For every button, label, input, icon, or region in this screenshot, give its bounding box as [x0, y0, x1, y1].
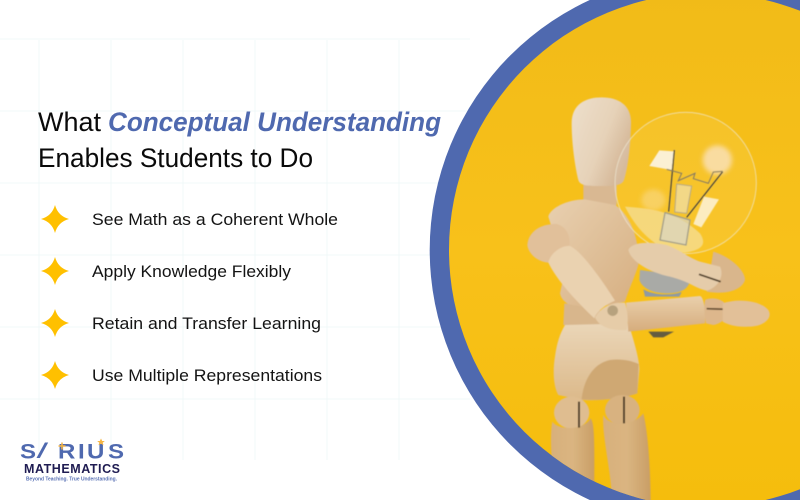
- glass mount: [660, 213, 690, 245]
- far arm behind bulb: [707, 252, 745, 293]
- mannequin hips: [554, 323, 639, 400]
- hip shadow patch: [582, 360, 639, 400]
- logo: Sirius Mathematics: R: [58, 439, 75, 463]
- item: apply knowledge flexibly: Apply Knowledge Flexibly: [92, 263, 292, 281]
- icon: logo star: [97, 438, 105, 445]
- title: [38, 107, 441, 173]
- title: Enables Students to Do: [38, 143, 313, 173]
- filament wires: [669, 150, 723, 217]
- shoulder joint: [527, 224, 570, 263]
- blue ring: [430, 0, 800, 500]
- mannequin abdomen: [563, 303, 600, 328]
- right knee joint: [605, 395, 640, 425]
- wooden mannequin holding a light bulb: [527, 97, 770, 500]
- right lower leg: [603, 413, 651, 500]
- glass bulb: [615, 112, 756, 254]
- logo: Sirius Mathematics: I: [78, 439, 85, 463]
- window highlight left: [649, 150, 674, 170]
- item: use multiple representations: Use Multiple Representations: [92, 367, 322, 385]
- logo slash: /: [36, 440, 49, 463]
- upper arm: [548, 246, 615, 318]
- item: retain and transfer learning: [41, 309, 321, 337]
- title: What: [38, 107, 102, 137]
- left knee joint: [554, 397, 589, 429]
- yellow photo background: [449, 0, 800, 500]
- bulb screw tip: [648, 332, 674, 337]
- logo: Sirius Mathematics: U: [87, 439, 104, 463]
- reflection lower left: [641, 189, 665, 211]
- logo: Sirius Mathematics: S: [108, 439, 124, 463]
- elbow screw: [607, 305, 618, 316]
- title: Conceptual Understanding: [108, 107, 441, 137]
- logo: Sirius Mathematics: [20, 438, 124, 482]
- item: apply knowledge flexibly: [41, 257, 292, 285]
- item: see math as a coherent whole: See Math as a Coherent Whole: [92, 211, 338, 229]
- item: use multiple representations: [41, 361, 322, 389]
- wrist slit: [699, 274, 721, 282]
- logo: Sirius Mathematics: S: [20, 439, 36, 463]
- elbow joint: [595, 303, 628, 330]
- left lower leg: [551, 418, 594, 485]
- hand resting on bulb: [628, 243, 721, 291]
- knee slits: [579, 397, 624, 428]
- bulb metal base: [639, 270, 691, 293]
- photo circle with blue ring: [430, 0, 800, 500]
- bulb base ring: [643, 289, 682, 297]
- item: see math as a coherent whole: [41, 205, 338, 233]
- mannequin neck: [582, 184, 618, 206]
- mannequin torso: [548, 199, 638, 310]
- mannequin head: [572, 97, 631, 186]
- open hand: [723, 301, 770, 327]
- list of four abilities: [41, 205, 338, 389]
- window highlight upper right: [703, 145, 732, 175]
- glass neck glow: [625, 207, 703, 253]
- glass stem: [675, 184, 692, 213]
- wrist slit lower: [706, 307, 724, 310]
- forearm: [626, 296, 705, 332]
- filament coil: [667, 169, 723, 183]
- item: retain and transfer learning: Retain and Transfer Learning: [92, 315, 321, 333]
- logo tagline: Beyond Teaching. True Understanding.: [26, 476, 117, 482]
- window highlight lower right: [693, 197, 719, 227]
- icon: logo plus sign: [58, 442, 66, 450]
- logo wordmark: MATHEMATICS: [24, 462, 120, 476]
- wrist joint: [704, 298, 727, 325]
